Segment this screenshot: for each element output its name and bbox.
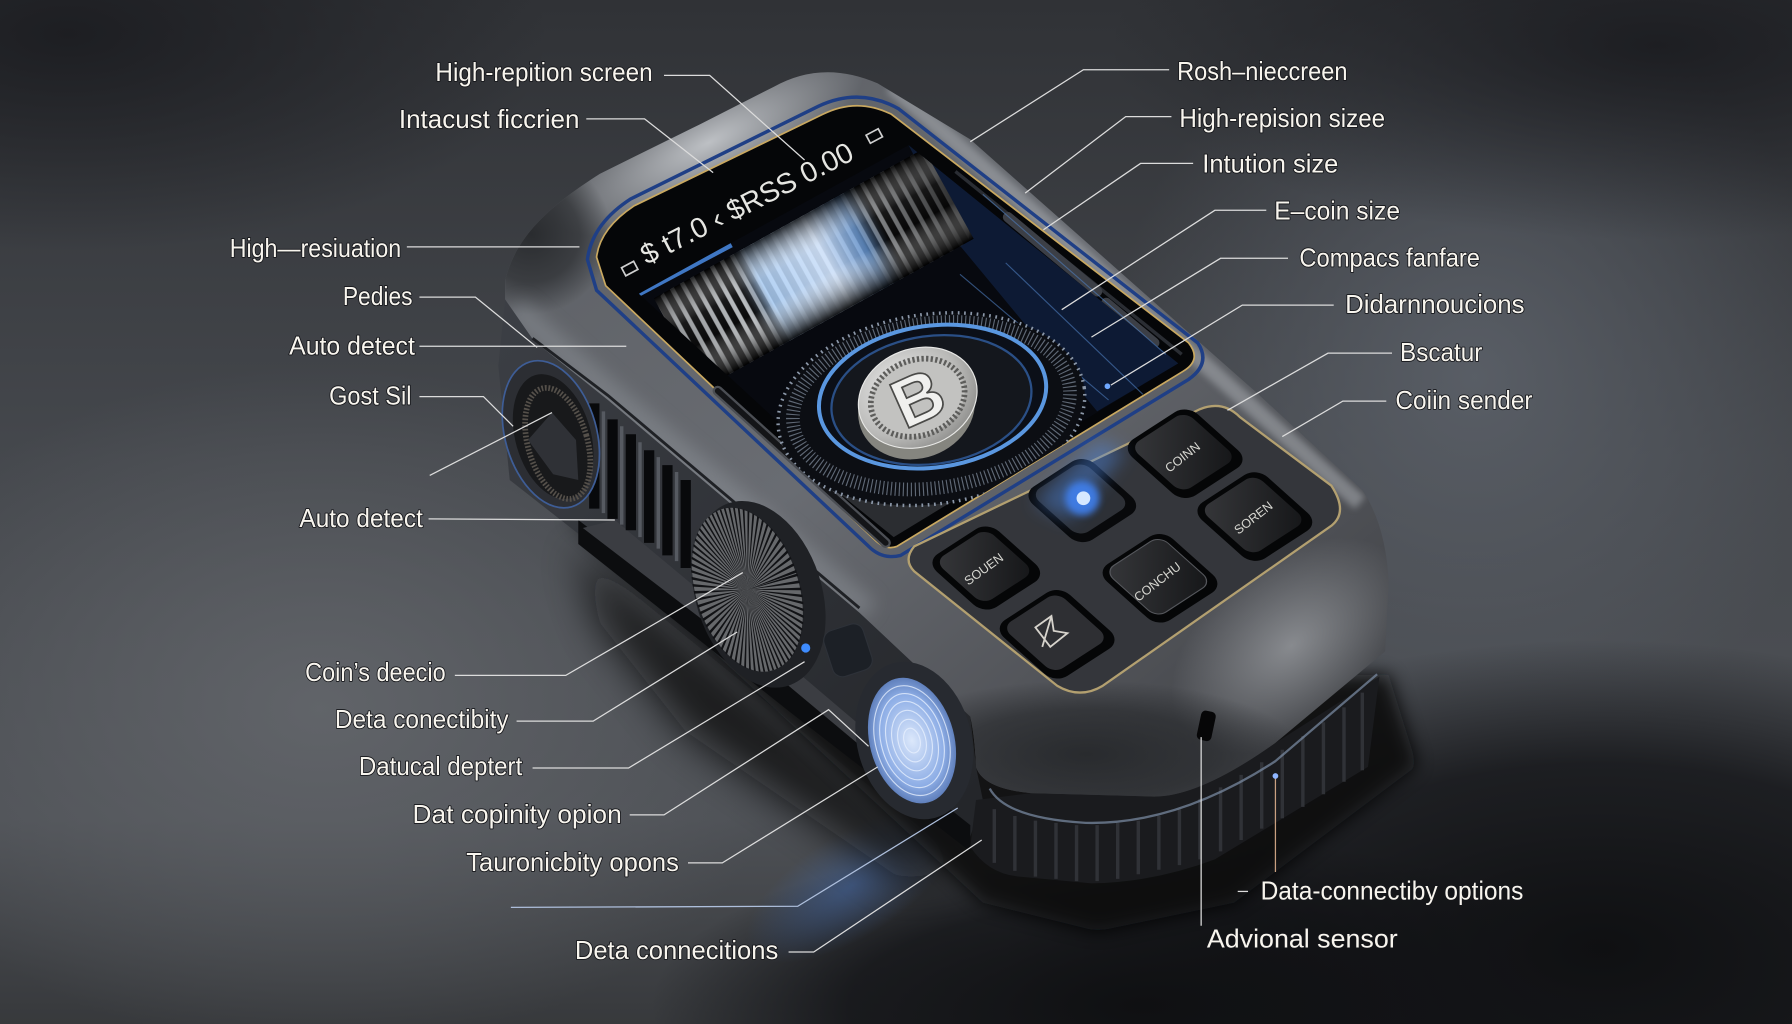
blue spiral lens [838, 649, 990, 833]
label: rosh-nieccreen: Rosh–nieccreen [1177, 56, 1347, 86]
button label: SOUEN [962, 551, 1006, 588]
label: dat copinity opion [413, 710, 869, 829]
label: rosh-nieccreen [970, 56, 1347, 142]
screen side slots [955, 171, 1182, 354]
callout labels [230, 56, 1533, 965]
label: tauronicbity opons [466, 767, 878, 877]
label: bscatur: Bscatur [1400, 337, 1483, 367]
label: coin's deecio [305, 573, 743, 687]
button label: CONCHU [1132, 560, 1184, 604]
label: pedies: Pedies [343, 281, 413, 311]
label: high-repition screen [435, 57, 805, 160]
coin stack cylinder [639, 149, 974, 388]
label: high-resiuation: High—resiuation [230, 233, 401, 263]
button: screen [1191, 467, 1319, 566]
button: confirm [1096, 529, 1224, 628]
label: high-repition screen: High-repition screen [435, 57, 653, 87]
display area [622, 129, 1178, 537]
label: deta connecitions [575, 840, 982, 965]
screen bezel [587, 97, 1203, 557]
label: deta conectibity: Deta conectibity [335, 704, 509, 734]
side fins [594, 403, 686, 568]
label: compacs fanfare [1091, 242, 1480, 337]
device shadow [566, 514, 1417, 931]
label: data-connectiby options: Data-connectiby options [1261, 875, 1523, 905]
leader without label [430, 413, 552, 475]
ribbed base band [970, 677, 1379, 883]
button: icon [993, 585, 1121, 684]
label: e-coin size: E–coin size [1274, 195, 1400, 225]
button: coin [1121, 404, 1249, 503]
button label: COINN [1162, 439, 1203, 475]
label: intacust ficcrien [399, 104, 713, 173]
label: datucal deptert [359, 662, 805, 781]
label: auto detect lower: Auto detect [299, 503, 423, 533]
blank blue leader [511, 808, 958, 907]
label: deta conectibity [335, 632, 737, 734]
icon glyph [1035, 616, 1067, 647]
label: deta connecitions: Deta connecitions [575, 935, 778, 965]
label: gost sil: Gost Sil [329, 381, 411, 411]
label: compacs fanfare: Compacs fanfare [1299, 242, 1480, 272]
label: pedies [343, 281, 537, 347]
label: didarnnoucions [1105, 289, 1525, 389]
shell shading [451, 14, 1452, 829]
status bar readout: $ t7.0 ‹ $RSS 0.00 [636, 137, 859, 271]
button: source [926, 521, 1047, 615]
label: didarnnoucions: Didarnnoucions [1345, 289, 1525, 319]
label: bscatur [1227, 337, 1483, 410]
fingerprint wheel [669, 484, 848, 705]
label: coin's deecio: Coin’s deecio [305, 657, 446, 687]
concentric coin rings [776, 311, 1086, 508]
button panel [909, 404, 1340, 693]
label: e-coin size [1062, 195, 1400, 310]
side port [821, 621, 875, 679]
bitcoin coin [844, 331, 991, 476]
label: dat copinity opion: Dat copinity opion [413, 799, 622, 829]
button: blue led [1034, 440, 1126, 520]
label: auto detect upper: Auto detect [289, 330, 416, 360]
label: intution size [1043, 149, 1338, 230]
lower side strip [578, 520, 970, 851]
label: intacust ficcrien: Intacust ficcrien [399, 104, 579, 134]
status icons [622, 129, 882, 276]
label: advional sensor: Advional sensor [1207, 923, 1398, 953]
label: high-repision sizee: High-repision sizee [1179, 103, 1385, 133]
label: data-connectiby options [1238, 773, 1523, 905]
button: light [1022, 454, 1143, 547]
left side wall [498, 299, 983, 837]
button label: SOREN [1232, 499, 1275, 537]
label: intution size: Intution size [1202, 149, 1338, 179]
label: tauronicbity opons: Tauronicbity opons [466, 847, 679, 877]
label: datucal deptert: Datucal deptert [359, 751, 523, 781]
label: gost sil [329, 381, 513, 426]
label: high-repision sizee [1025, 103, 1385, 193]
lower screen wedge [840, 494, 951, 537]
label: coiin sender: Coiin sender [1395, 385, 1533, 415]
metal shell [505, 72, 1389, 797]
side barrel port [486, 349, 616, 519]
bitcoin coin: B [880, 353, 956, 443]
device body [501, 72, 1386, 884]
sensor notch [1196, 710, 1217, 742]
label: coiin sender [1282, 385, 1533, 437]
